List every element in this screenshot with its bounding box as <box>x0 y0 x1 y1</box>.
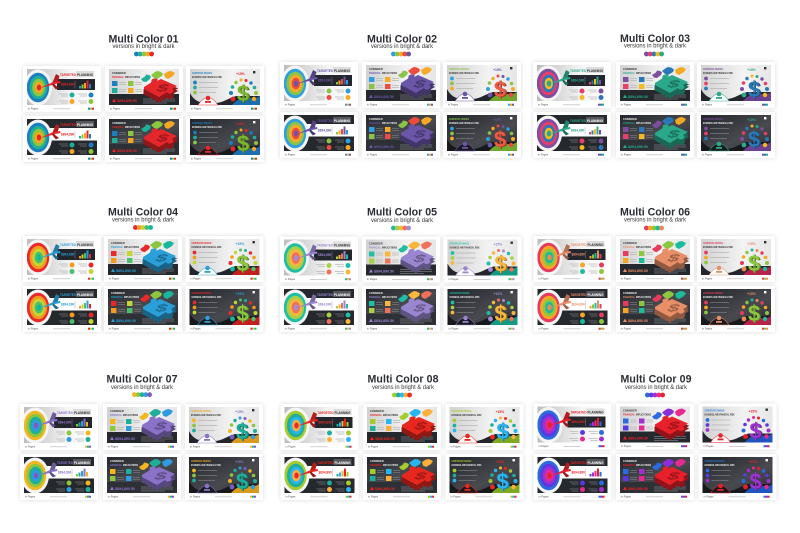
slide: dark targeted planning <box>280 286 358 332</box>
slide: bright financial implications <box>616 404 694 450</box>
slide: bright targeted planning <box>533 62 611 108</box>
subheading: versions in bright & dark <box>111 385 174 391</box>
slide: dark targeted planning <box>23 116 101 162</box>
slide: dark financial implications <box>362 112 440 158</box>
panel: Multi Color 04 <box>23 207 264 332</box>
slide: dark corporate finance <box>446 454 524 500</box>
slide: dark corporate finance <box>443 112 521 158</box>
slide: bright targeted planning <box>280 236 358 282</box>
panel: Multi Color 01 <box>23 33 264 162</box>
slide: dark targeted planning <box>20 454 98 500</box>
slide: dark financial implications <box>104 286 182 332</box>
slide: dark financial implications <box>362 286 440 332</box>
subheading: versions in bright & dark <box>624 44 687 50</box>
colour swatches <box>132 392 152 397</box>
slide: bright corporate finance <box>444 236 522 282</box>
subheading: versions in bright & dark <box>624 218 687 224</box>
panel: Multi Color 02 <box>280 33 521 158</box>
slide: dark targeted planning <box>534 286 612 332</box>
subheading: versions in bright & dark <box>372 385 435 391</box>
heading: Multi Color 04 <box>108 207 178 219</box>
slide: bright targeted planning <box>23 236 101 282</box>
slide: bright corporate finance <box>446 404 524 450</box>
slide: bright targeted planning <box>534 236 612 282</box>
colour swatches <box>134 52 154 56</box>
heading: Multi Color 06 <box>620 207 690 219</box>
slide: bright targeted planning <box>534 404 612 450</box>
subheading: versions in bright & dark <box>625 385 688 391</box>
heading: Multi Color 02 <box>367 33 437 45</box>
colour swatches <box>644 226 664 230</box>
slide: dark corporate finance <box>698 454 776 500</box>
heading: Multi Color 05 <box>367 207 437 219</box>
subheading: versions in bright & dark <box>112 44 175 50</box>
slide: dark targeted planning <box>280 454 358 500</box>
slide: dark financial implications <box>616 454 694 500</box>
slide: dark corporate finance <box>186 116 264 162</box>
slide: bright corporate finance <box>186 236 264 282</box>
slide: bright financial implications <box>616 62 694 108</box>
panel: Multi Color 07 <box>20 374 263 500</box>
slide: dark corporate finance <box>697 286 775 332</box>
heading: Multi Color 09 <box>620 374 692 386</box>
slide: bright targeted planning <box>280 404 358 450</box>
subheading: versions in bright & dark <box>371 218 434 224</box>
slide: dark targeted planning <box>533 112 611 158</box>
slide: dark corporate finance <box>697 112 775 158</box>
colour swatches <box>133 225 153 230</box>
slide: bright targeted planning <box>20 404 98 450</box>
slide: dark financial implications <box>105 116 183 162</box>
slide: dark financial implications <box>103 454 181 500</box>
panel: Multi Color 03 <box>533 33 775 158</box>
slide: bright corporate finance <box>443 62 521 108</box>
heading: Multi Color 07 <box>106 374 178 386</box>
colour swatches <box>391 52 411 56</box>
slide: bright targeted planning <box>23 66 101 112</box>
slide: bright targeted planning <box>280 62 358 108</box>
slide: bright financial implications <box>105 66 183 112</box>
slide: bright financial implications <box>103 404 181 450</box>
slide: bright corporate finance <box>185 404 263 450</box>
slide: dark targeted planning <box>534 454 612 500</box>
slide: bright financial implications <box>363 404 441 450</box>
slide: bright financial implications <box>362 62 440 108</box>
colour swatches <box>391 226 411 230</box>
slide: dark corporate finance <box>444 286 522 332</box>
colour swatches <box>644 52 664 56</box>
slide: dark financial implications <box>363 454 441 500</box>
slide: bright financial implications <box>104 236 182 282</box>
subheading: versions in bright & dark <box>371 44 434 50</box>
slide: dark financial implications <box>616 112 694 158</box>
heading: Multi Color 03 <box>620 33 690 45</box>
slide: dark corporate finance <box>186 286 264 332</box>
colour swatches <box>645 393 665 397</box>
panel: Multi Color 05 <box>280 207 522 332</box>
panel: Multi Color 08 <box>280 374 524 500</box>
heading: Multi Color 01 <box>108 33 179 45</box>
subheading: versions in bright & dark <box>112 218 175 224</box>
slide: bright corporate finance <box>697 62 775 108</box>
slide: bright financial implications <box>362 236 440 282</box>
panel: Multi Color 06 <box>534 207 775 332</box>
slide: bright corporate finance <box>697 236 775 282</box>
slide: dark targeted planning <box>280 112 358 158</box>
slide: dark corporate finance <box>185 454 263 500</box>
panel: Multi Color 09 <box>534 374 776 500</box>
slide: bright corporate finance <box>698 404 776 450</box>
heading: Multi Color 08 <box>368 374 439 386</box>
slide: bright financial implications <box>616 236 694 282</box>
slide: dark financial implications <box>616 286 694 332</box>
colour swatches <box>392 393 412 397</box>
slide: dark targeted planning <box>23 286 101 332</box>
slide: bright corporate finance <box>186 66 264 112</box>
